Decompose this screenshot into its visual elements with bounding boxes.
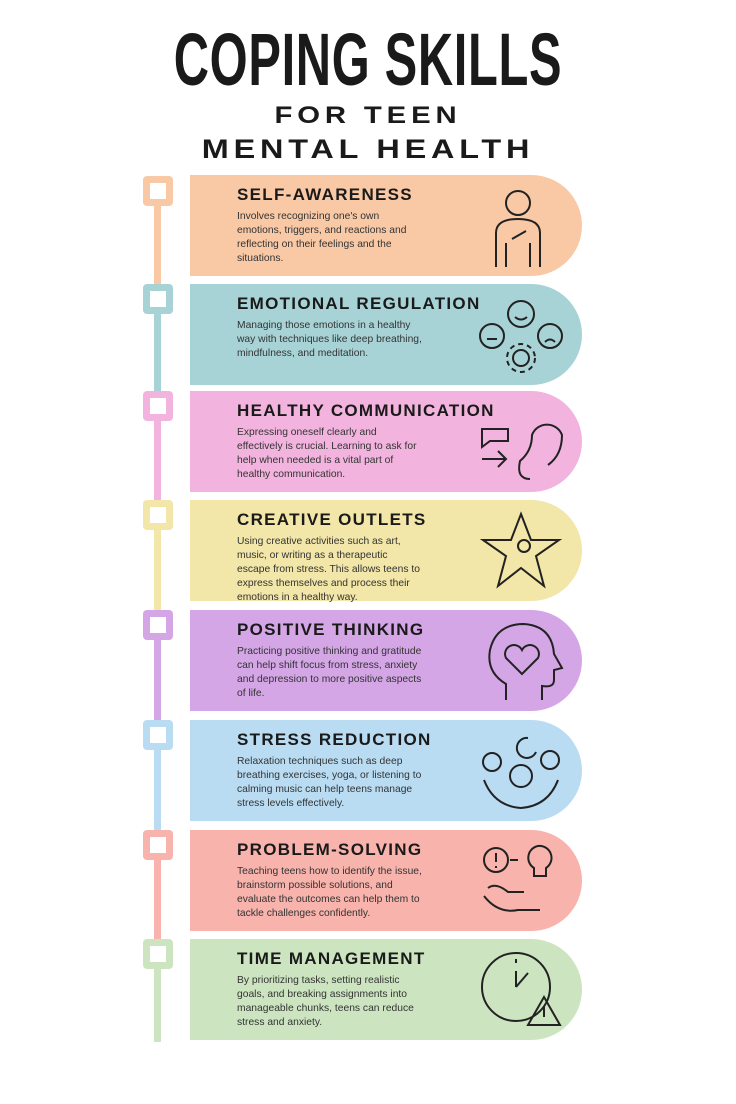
subtitle line 1: FOR TEEN <box>274 102 462 129</box>
icon: clock with warning <box>481 952 562 1026</box>
panel: stress reduction: Relaxation techniques such as deep breathing exercises, yoga, or listening to calming music can help teens manage stress levels effectively. <box>237 756 421 809</box>
panel: healthy communication <box>190 391 582 492</box>
panel: positive thinking: Practicing positive thinking and gratitude can help shift focus from stress, anxiety and depression to more positive aspects of life. <box>237 646 421 699</box>
panel: creative outlets: Using creative activities such as art, music, or writing as a therapeutic escape from stress. This allows teens to express themselves and process their emotions in a healthy way. <box>237 536 420 603</box>
panel: positive thinking: POSITIVE THINKING <box>237 620 424 639</box>
icon: relaxation <box>482 736 560 809</box>
panel: time management: TIME MANAGEMENT <box>237 949 426 968</box>
panel: self-awareness: Involves recognizing one's own emotions, triggers, and reactions and reflecting on their feelings and the situations. <box>237 211 406 264</box>
panel: time management: By prioritizing tasks, setting realistic goals, and breaking assignments into manageable chunks, teens can reduce stress and anxiety. <box>237 975 414 1028</box>
panel: emotional regulation: EMOTIONAL REGULATION <box>237 294 481 313</box>
panel: emotional regulation <box>190 284 582 385</box>
panel: problem-solving <box>190 830 582 931</box>
panel: problem-solving: PROBLEM-SOLVING <box>237 840 422 859</box>
panel: self-awareness <box>190 175 582 276</box>
panel: stress reduction <box>190 720 582 821</box>
panel: emotional regulation: Managing those emotions in a healthy way with techniques like deep breathing, mindfulness, and meditation. <box>237 320 422 359</box>
title: COPING SKILLS <box>174 18 562 101</box>
panel: stress reduction: STRESS REDUCTION <box>237 730 432 749</box>
panel: creative outlets <box>190 500 582 601</box>
panel: healthy communication: Expressing oneself clearly and effectively is crucial. Learning to ask for help when needed is a vital part of healthy communication. <box>237 427 417 480</box>
icon: ear <box>481 424 563 480</box>
icon: star <box>480 511 562 588</box>
panel: creative outlets: CREATIVE OUTLETS <box>237 510 427 529</box>
icon: faces and gear <box>479 300 563 373</box>
subtitle line 2: MENTAL HEALTH <box>202 134 534 164</box>
icon: person <box>495 190 541 267</box>
panel: healthy communication: HEALTHY COMMUNICATION <box>237 401 495 420</box>
panel: self-awareness: SELF-AWARENESS <box>237 185 413 204</box>
icon: hand with bulb <box>483 844 553 912</box>
panel: time management <box>190 939 582 1040</box>
icon: head with heart <box>488 623 564 700</box>
panel: positive thinking <box>190 610 582 711</box>
panel: problem-solving: Teaching teens how to identify the issue, brainstorm possible solutions, and evaluate the outcomes can help them to tackle challenges confidently. <box>237 866 422 919</box>
